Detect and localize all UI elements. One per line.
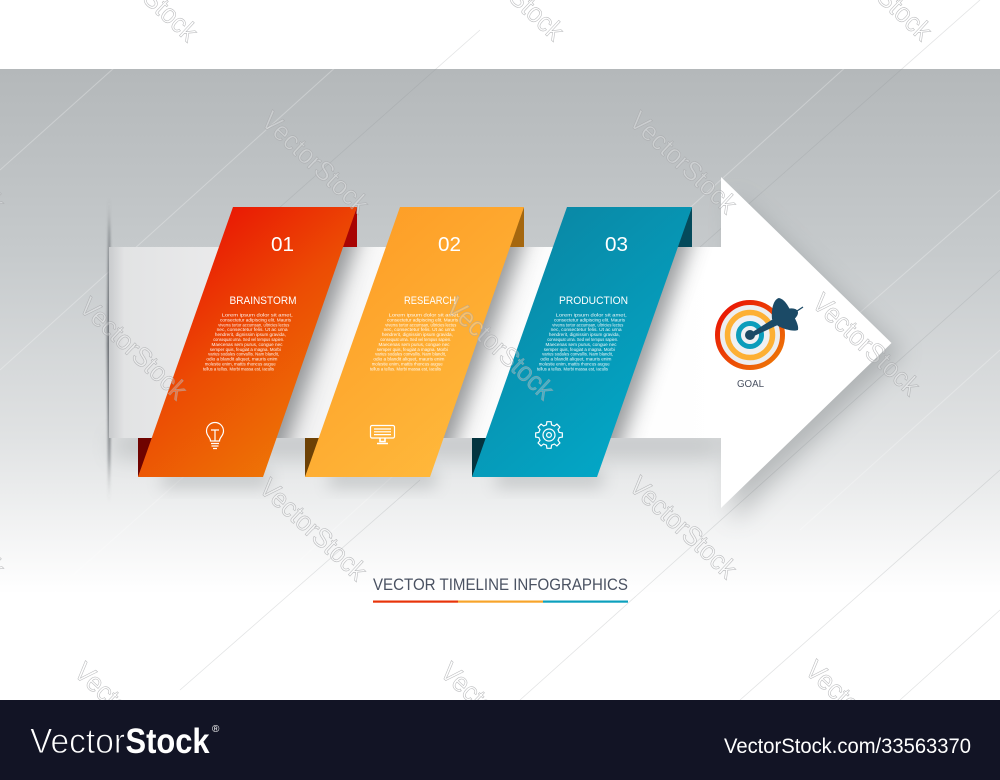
body text 3: nec, consectetur felis. Ut ac urna: [551, 327, 622, 332]
body text 3: consequat urna. Sed vel tempus sapien.: [547, 337, 618, 342]
watermarks: VectorStock: [800, 654, 919, 769]
footer bar: [0, 700, 1000, 780]
number 03: 03: [605, 234, 628, 256]
watermarks: VectorStock: [74, 291, 193, 406]
body text 2: consequat urna. Sed vel tempus sapien.: [380, 337, 451, 342]
fold: ribbon 2 top: [509, 207, 524, 247]
body text 2: [370, 312, 460, 371]
title: VECTOR TIMELINE INFOGRAPHICS: [373, 576, 628, 594]
title underline: [373, 600, 628, 603]
body text 1: Lorem ipsum dolor sit amet,: [222, 312, 293, 318]
number 02: 02: [438, 234, 461, 256]
watermarks: VectorStock: [254, 472, 373, 587]
body text 1: Maecenas sem purus, congue nec: [212, 342, 283, 347]
body text 2: molestie enim, mattis rhoncus augue: [372, 362, 443, 366]
arrow body: [109, 177, 892, 508]
fold: ribbon 2 bottom: [305, 438, 320, 477]
body text 2: consectetur adipiscing elit. Mauris: [387, 317, 459, 322]
number 01: 01: [271, 234, 294, 256]
body text 2: hendrerit, dignissim ipsum gravida,: [382, 332, 453, 337]
body text 1: viverra tortor accumsan, ultricies lectus: [218, 322, 290, 327]
watermarks: VectorStock: [624, 470, 743, 585]
body text 2: viverra tortor accumsan, ultricies lectus: [385, 322, 457, 327]
target rings: [718, 302, 782, 368]
heading: brainstorm: BRAINSTORM: [230, 295, 296, 307]
body text 1: nec, consectetur felis. Ut ac urna: [217, 327, 288, 332]
footer registered mark: ®: [212, 724, 220, 735]
footer logo: [30, 722, 210, 761]
body text 3: tellus a tellus. Morbi massa est, iaculis: [537, 366, 609, 371]
body text 1: odio a blandit aliquet, mauris enim: [206, 357, 278, 362]
watermarks: VectorStock: [435, 656, 554, 771]
body text 3: semper quis, feugiat a magna. Morbi: [544, 347, 615, 352]
body text 1: molestie enim, mattis rhoncus augue: [205, 362, 276, 366]
body text 1: [203, 312, 293, 371]
footer logo: Stock: [126, 722, 210, 761]
ribbon 1: [138, 207, 357, 477]
icon: dart: [750, 298, 803, 337]
watermarks: VectorStock: [441, 291, 560, 406]
body text 1: semper quis, feugiat a magna. Morbi: [210, 347, 281, 352]
body text 3: Lorem ipsum dolor sit amet,: [556, 312, 627, 318]
fold: ribbon 3 bottom: [472, 438, 487, 477]
label: goal: GOAL: [737, 378, 764, 390]
watermarks: VectorStock: [69, 656, 188, 771]
icon: light bulb: [206, 422, 224, 448]
body text 3: hendrerit, dignissim ipsum gravida,: [549, 332, 620, 337]
fold: ribbon 1 bottom: [138, 438, 153, 477]
goal target: [718, 298, 803, 390]
fold: ribbon 3 top: [677, 207, 692, 247]
ribbon 3: [472, 207, 692, 477]
fold: ribbon 1 top: [342, 207, 357, 247]
body text 2: nec, consectetur felis. Ut ac urna: [384, 327, 455, 332]
panel: step 02 research: [305, 207, 524, 477]
body text 1: hendrerit, dignissim ipsum gravida,: [215, 332, 286, 337]
body text 3: consectetur adipiscing elit. Mauris: [554, 317, 626, 322]
footer background: [0, 700, 1000, 780]
body text 2: Maecenas sem purus, congue nec: [378, 342, 450, 347]
ribbon 2: [305, 207, 524, 477]
footer url: VectorStock.com/33563370: [724, 735, 971, 758]
body text 3: odio a blandit aliquet, mauris enim: [540, 357, 612, 362]
panel: step 01 brainstorm: [138, 207, 357, 477]
body text 3: varius sodales convallis. Nam blandit,: [542, 352, 613, 357]
watermarks: VectorStock: [807, 287, 926, 402]
body text 1: consequat urna. Sed vel tempus sapien.: [213, 337, 284, 342]
left slit shadow: [107, 195, 112, 506]
body text 2: varius sodales convallis. Nam blandit,: [375, 352, 446, 357]
watermarks: VectorStock: [256, 105, 375, 220]
heading: production: PRODUCTION: [559, 295, 628, 307]
footer logo: Vector: [30, 722, 125, 761]
gray gradient panel: [0, 69, 1000, 594]
body text 2: tellus a tellus. Morbi massa est, iaculis: [370, 366, 442, 371]
body text 2: odio a blandit aliquet, mauris enim: [373, 357, 445, 362]
icon: monitor: [370, 426, 394, 444]
body text 3: viverra tortor accumsan, ultricies lectus: [552, 322, 624, 327]
body text 1: tellus a tellus. Morbi massa est, iaculis: [203, 366, 275, 371]
watermarks: VectorStock: [624, 105, 743, 220]
heading: research: RESEARCH: [404, 295, 456, 307]
body text 3: [537, 312, 627, 371]
body text 3: Maecenas sem purus, congue nec: [546, 342, 617, 347]
arrow shaft: [109, 247, 721, 438]
body text 2: semper quis, feugiat a magna. Morbi: [377, 347, 448, 352]
arrow drop shadow: [115, 195, 903, 522]
body text 3: molestie enim, mattis rhoncus augue: [539, 362, 610, 366]
panel: step 03 production: [472, 207, 692, 477]
body text 2: Lorem ipsum dolor sit amet,: [389, 312, 460, 318]
icon: gear: [536, 422, 562, 448]
body text 1: varius sodales convallis. Nam blandit,: [208, 352, 279, 357]
arrow head: [721, 177, 892, 508]
body text 1: consectetur adipiscing elit. Mauris: [220, 317, 292, 322]
